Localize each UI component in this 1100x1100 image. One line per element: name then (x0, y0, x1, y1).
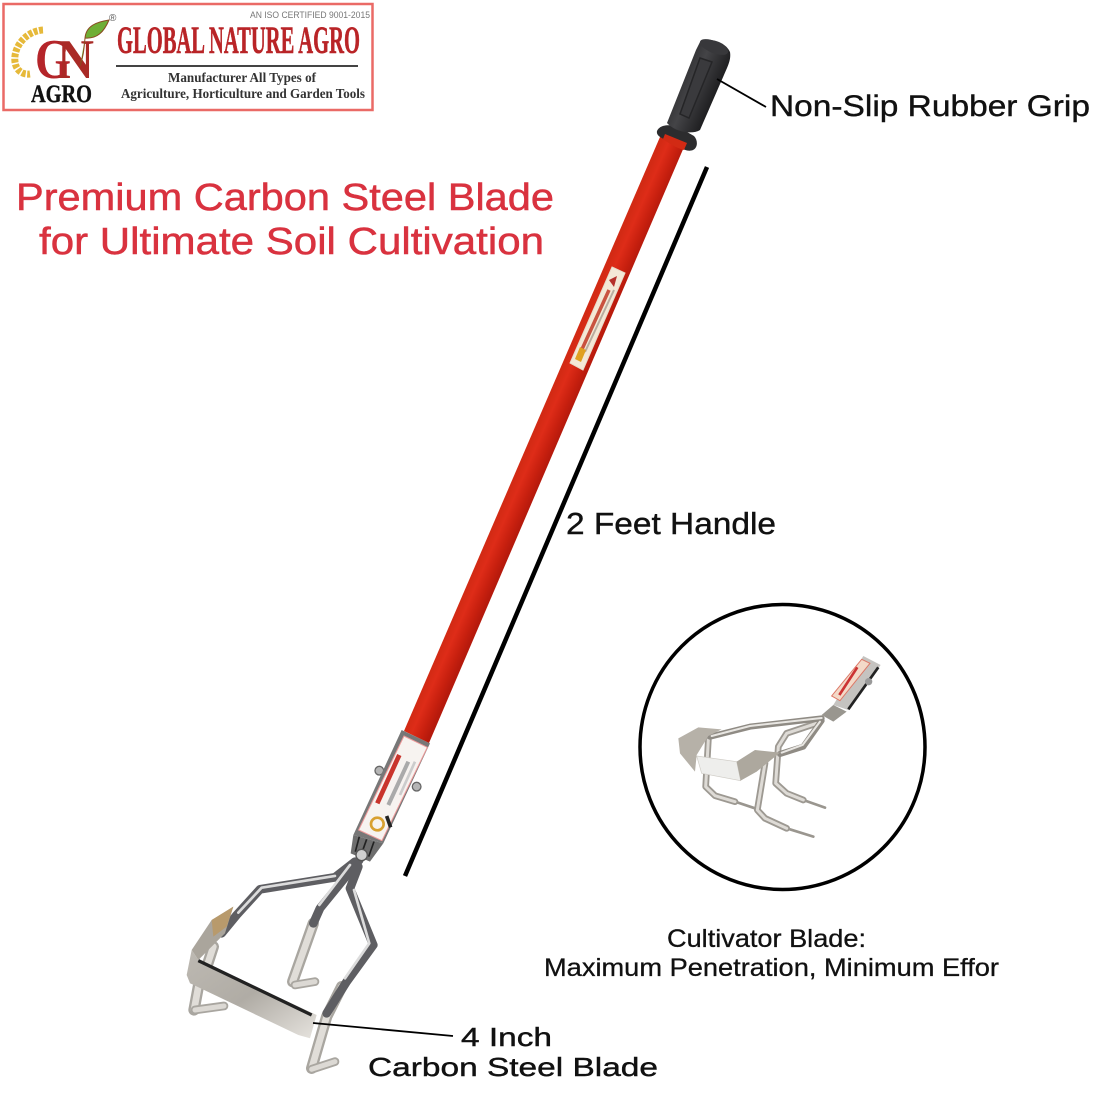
logo tagline: Manufacturer All Types of (168, 71, 316, 86)
logo registered mark: ® (109, 13, 117, 24)
sleeve neck (351, 835, 383, 862)
red handle (404, 130, 687, 743)
metal sleeve (353, 730, 430, 843)
logo AGRO text: AGRO (31, 81, 92, 108)
logo: Global Nature Agro (4, 4, 372, 110)
rubber grip (657, 36, 730, 151)
close-up socket (833, 656, 881, 710)
label: 2 Feet Handle: 2 Feet Handle (566, 506, 776, 541)
fork head (187, 730, 430, 1069)
logo company name: GLOBAL NATURE AGRO (117, 19, 360, 62)
label: blade size: Carbon Steel Blade (368, 1052, 658, 1082)
caption: cultivator blade: Maximum Penetration, Minimum Effor (544, 954, 999, 982)
label: Non-Slip Rubber Grip: Non-Slip Rubber Grip (770, 90, 1090, 123)
measure line: handle length (405, 167, 707, 876)
handle label sticker (570, 267, 625, 370)
panel: cultivator blade close-up (640, 604, 925, 890)
sleeve ball joint (356, 849, 367, 861)
close-up tool (678, 656, 881, 837)
caption: cultivator blade: Cultivator Blade: (667, 925, 866, 953)
cultivator tool (187, 36, 730, 1069)
title: Premium Carbon Steel Blade (16, 177, 554, 219)
bolts (375, 766, 421, 791)
label: blade size: 4 Inch (461, 1022, 552, 1052)
side wing of blade (192, 907, 233, 960)
logo leaf (80, 20, 109, 66)
logo ISO text: AN ISO CERTIFIED 9001-2015 (250, 10, 370, 21)
front blade plate (187, 950, 317, 1038)
leader line: blade (313, 1023, 453, 1036)
logo wheat wreath (15, 30, 43, 74)
rods (194, 860, 373, 1069)
logo GN letters: N (57, 29, 94, 91)
logo tagline: Agriculture, Horticulture and Garden Tools (121, 87, 366, 102)
leader line: grip (717, 79, 766, 107)
caption: cultivator blade (544, 925, 999, 982)
logo tagline (121, 71, 366, 102)
close-up blade plates (678, 727, 722, 772)
title: for Ultimate Soil Cultivation (39, 221, 544, 263)
title (16, 177, 554, 263)
logo GN letters: G (35, 29, 71, 91)
label: blade size (368, 1022, 658, 1082)
